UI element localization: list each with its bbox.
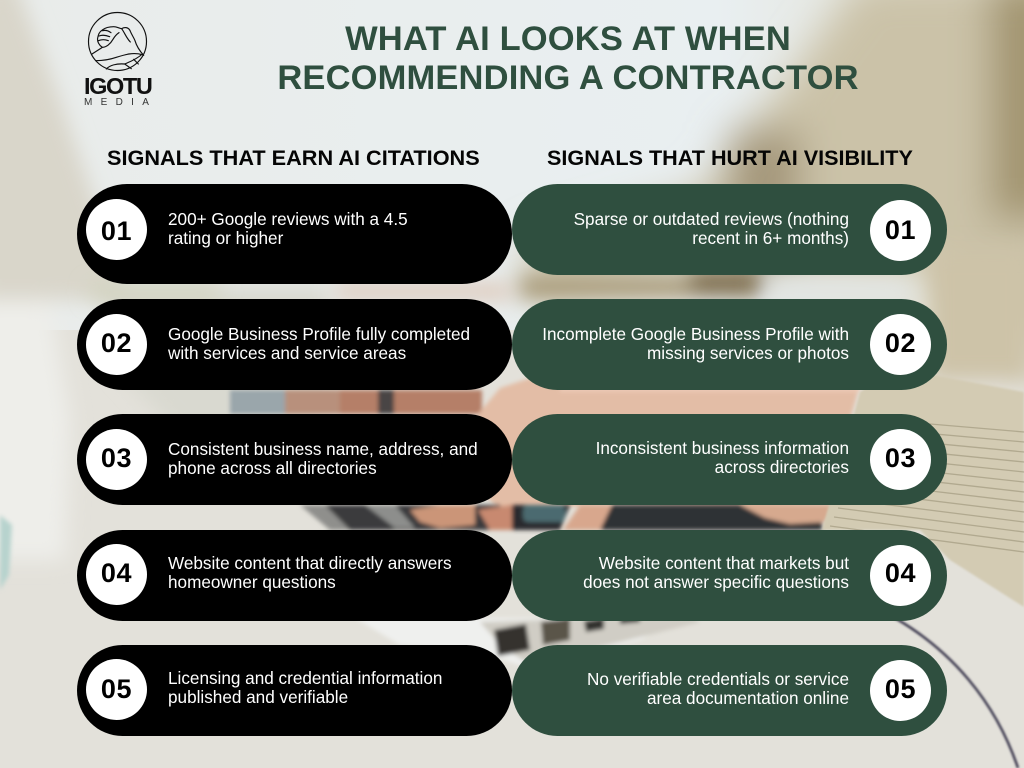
left item 02 [77,299,512,390]
left item 01: 01 [101,216,132,246]
right item 05: No verifiable credentials or service [587,669,849,689]
right item 03: 03 [885,443,916,473]
heading: signals that hurt AI visibility: SIGNALS THAT HURT AI VISIBILITY [547,145,913,170]
right item 03 [512,414,947,505]
right item 04 [512,530,947,621]
left item 05 [77,645,512,736]
left item 01: 200+ Google reviews with a 4.5 [168,209,408,229]
left item 05: 05 [101,674,132,704]
right item 04: 04 [885,558,916,588]
right item 04: Website content that markets but [599,553,849,573]
logo: IGOTU Media [84,12,157,108]
right item 02: Incomplete Google Business Profile with [542,324,849,344]
icon: clasped hands in a circle [88,12,148,72]
right item 03: across directories [715,457,849,477]
left item 02: with services and service areas [168,343,406,363]
left item 01: rating or higher [168,228,283,248]
right item 04: does not answer specific questions [583,572,849,592]
logo subtitle: MEDIA [84,97,157,108]
right item 05: area documentation online [647,688,849,708]
left item 05: published and verifiable [168,687,348,707]
title: WHAT AI LOOKS AT WHEN [345,20,791,58]
left item 04: homeowner questions [168,572,336,592]
right item 03: Inconsistent business information [596,438,849,458]
right item 02: missing services or photos [647,343,849,363]
left item 04: Website content that directly answers [168,553,452,573]
right item 01: Sparse or outdated reviews (nothing [574,209,849,229]
left item 03 [77,414,512,505]
right item 01: recent in 6+ months) [692,228,849,248]
sweater sleeve [822,372,1024,607]
left item 03: Consistent business name, address, and [168,439,478,459]
left item 02: Google Business Profile fully completed [168,324,470,344]
left item 03: 03 [101,443,132,473]
title: RECOMMENDING A CONTRACTOR [277,58,859,96]
left item 01 [77,184,512,284]
heading: signals that earn AI citations: SIGNALS THAT EARN AI CITATIONS [107,145,480,170]
right item 01: 01 [885,215,916,245]
left item 03: phone across all directories [168,458,377,478]
right item 01 [512,184,947,275]
logo wordmark: IGOTU [84,73,151,99]
right item 02 [512,299,947,390]
left item 04: 04 [101,558,132,588]
title [277,20,859,96]
left item 05: Licensing and credential information [168,668,442,688]
left item 02: 02 [101,328,132,358]
right item 05 [512,645,947,736]
right item 05: 05 [885,674,916,704]
left item 04 [77,530,512,621]
right item 02: 02 [885,328,916,358]
